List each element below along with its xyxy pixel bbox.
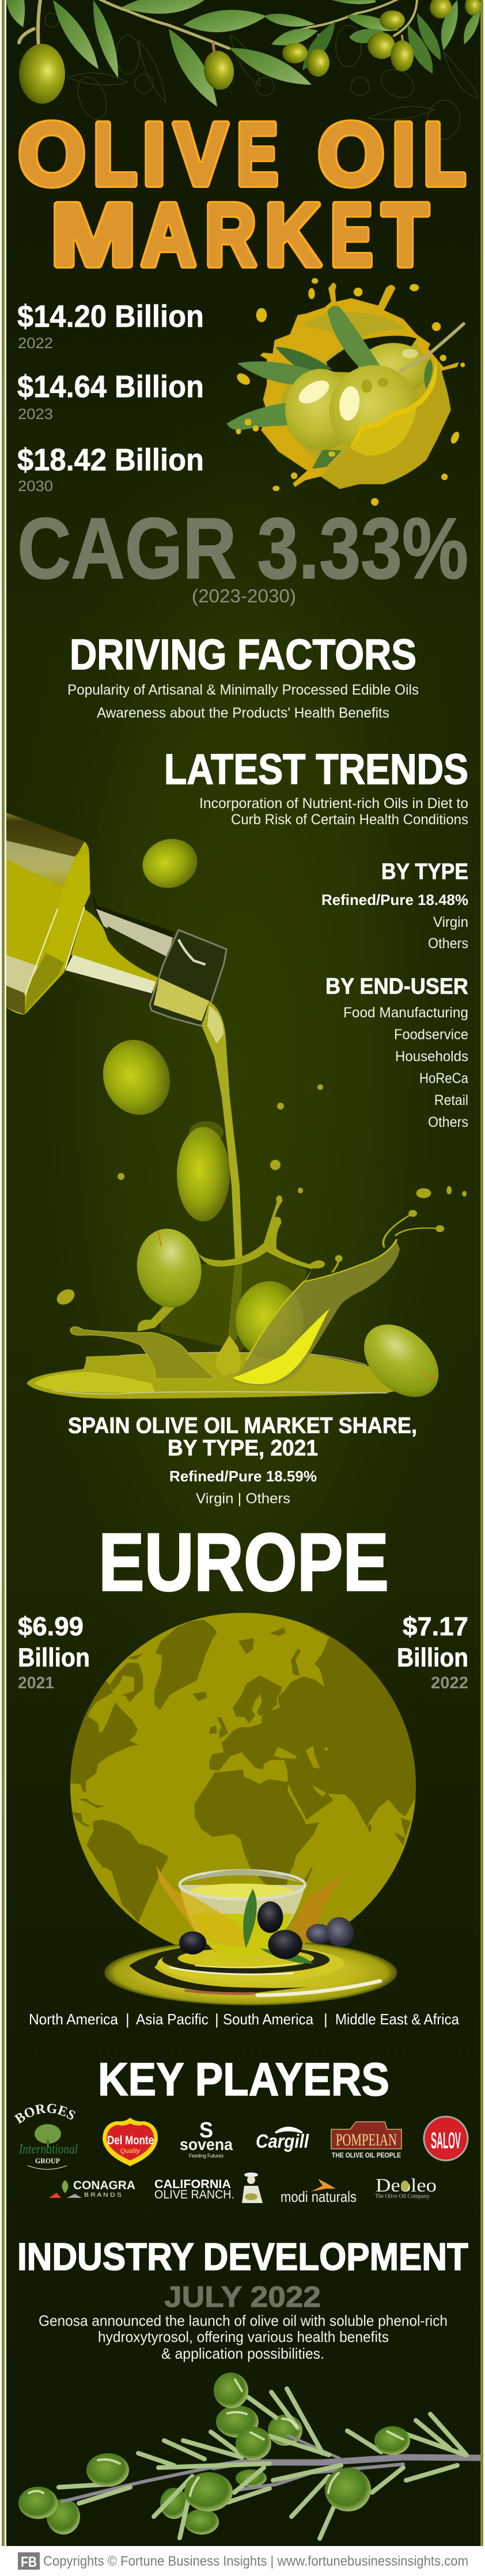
latest trends: Curb Risk of Certain Health Conditions — [231, 812, 468, 828]
glass rim — [180, 1870, 305, 1899]
title: R — [205, 186, 256, 284]
land masses — [62, 1620, 427, 1868]
dark gap in splash — [327, 335, 416, 373]
title: M — [51, 186, 136, 284]
by end-user segment: Foodservice — [394, 1027, 468, 1043]
splash back — [161, 1253, 306, 1351]
market value 2022: Billion — [397, 1643, 468, 1672]
key player logos — [14, 2104, 469, 2205]
market value 2021: 2021 — [18, 1674, 54, 1692]
neck oil — [71, 909, 160, 991]
left gold splash — [156, 1866, 252, 1952]
Madagascar — [302, 1868, 313, 1885]
body highlights — [25, 907, 85, 995]
industry development: hydroxytyrosol, offering various health benefits — [98, 2328, 389, 2345]
driving factors: Popularity of Artisanal & Minimally Processed Edible Oils — [67, 682, 419, 698]
logo: Salov — [424, 2117, 468, 2160]
footer copyright — [18, 2552, 468, 2570]
oil surface — [190, 1884, 293, 1900]
lower left leaf — [226, 402, 288, 431]
by type segment: Virgin — [433, 914, 468, 930]
middle ripple — [157, 1945, 344, 1982]
oil in bowl — [191, 1914, 293, 1957]
front olives — [18, 2369, 410, 2519]
body facet — [46, 855, 90, 972]
title: K — [265, 186, 321, 284]
blurred olive — [177, 1127, 230, 1221]
right gold splash — [291, 1869, 345, 1944]
olive highlights — [29, 2379, 403, 2496]
bottle cap glass — [150, 930, 226, 1026]
Spain market share: SPAIN OLIVE OIL MARKET SHARE, — [68, 1413, 417, 1438]
pale band — [6, 840, 76, 888]
logo: Pompeian: THE OLIVE OIL PEOPLE — [332, 2151, 401, 2159]
top leaf — [327, 306, 380, 369]
title: V — [174, 105, 228, 203]
logo: modi naturals — [281, 2179, 357, 2205]
inner bright ripple — [178, 1948, 314, 1968]
lower dark band — [6, 986, 25, 1014]
inner dark ripple — [162, 1946, 329, 1974]
by end-user segment — [325, 974, 468, 1130]
industry development: Genosa announced the launch of olive oil with soluble phenol-rich — [39, 2312, 448, 2329]
Spain market share: Refined/Pure 18.59% — [169, 1468, 317, 1485]
market value 2022 — [397, 1612, 468, 1692]
logo: sovena: sovena — [180, 2136, 233, 2154]
title: L — [93, 105, 137, 203]
value 2022: 2022 — [18, 334, 53, 352]
logo: Del Monte — [103, 2118, 158, 2166]
crown splash — [196, 1195, 325, 1282]
neck dark top — [92, 893, 175, 941]
oil front splash — [181, 1891, 250, 1947]
branch stems — [17, 0, 418, 52]
oil pool — [26, 1352, 438, 1399]
market value 2021: $6.99 — [18, 1612, 84, 1641]
value 2023: 2023 — [18, 405, 53, 423]
logo: Conagra — [49, 2179, 135, 2198]
green olives — [19, 0, 481, 104]
olive with stem, right — [350, 1317, 453, 1404]
right tendrils — [332, 1213, 440, 1272]
logo: California Olive Ranch — [154, 2173, 263, 2203]
key players heading: KEY PLAYERS — [98, 2054, 389, 2106]
logo: Deoleo: The Olive Oil Company. — [375, 2193, 430, 2200]
right olive — [329, 365, 419, 456]
by type segment — [321, 859, 468, 952]
oil crest — [351, 357, 437, 448]
centre column — [216, 1336, 241, 1376]
upper drops above the splash — [118, 1084, 323, 1180]
rim inner glass — [182, 1869, 303, 1883]
other regions: | — [215, 2011, 219, 2028]
driving factors: DRIVING FACTORS — [70, 631, 416, 678]
bottom leaf — [312, 450, 342, 469]
market value 2021 — [18, 1612, 90, 1692]
falling olive 2 — [103, 1040, 170, 1115]
value 2022: $14.20 Billion — [17, 299, 204, 334]
logo: sovena: Feeding Futures — [189, 2153, 223, 2159]
title: E — [237, 105, 278, 203]
lower pale band — [6, 955, 44, 993]
logo: sovena — [180, 2118, 233, 2159]
neck pale glass — [96, 909, 173, 961]
by end-user segment: Food Manufacturing — [343, 1005, 468, 1021]
title: I — [392, 105, 415, 203]
oil inside cap — [154, 978, 209, 1021]
value 2030: $18.42 Billion — [17, 443, 204, 477]
value 2023 — [17, 369, 204, 423]
logo: Borges — [14, 2104, 78, 2170]
oil ripple pool — [104, 1940, 397, 2005]
title: L — [423, 105, 466, 203]
industry development: JULY 2022 — [164, 2280, 321, 2313]
illustration: bottom olive branch — [18, 2369, 480, 2539]
white highlights — [170, 1964, 380, 1996]
logo: Borges: International — [18, 2142, 78, 2157]
title: T — [382, 186, 429, 284]
Spain market share — [68, 1413, 417, 1507]
upper leaf — [275, 347, 332, 375]
dark purple olives — [306, 1913, 358, 1951]
logo: Deoleo: Deoleo — [376, 2175, 437, 2196]
small right leaf — [424, 359, 433, 389]
Spain market share: BY TYPE, 2021 — [168, 1436, 318, 1461]
by type segment: Refined/Pure 18.48% — [321, 891, 468, 908]
other regions: South America — [223, 2011, 313, 2028]
glass bowl — [180, 1885, 305, 1957]
value 2022 — [17, 299, 204, 352]
dark ripple crescent — [129, 1943, 351, 1993]
left olive — [285, 369, 356, 450]
by end-user segment: Others — [428, 1114, 468, 1130]
industry development — [17, 2235, 468, 2362]
logo: Pompeian: POMPEIAN — [336, 2130, 397, 2149]
industry development: & application possibilities. — [161, 2345, 324, 2362]
top olive branches illustration — [6, 0, 481, 107]
lower facet — [25, 953, 65, 1013]
other regions — [29, 2011, 459, 2028]
logo: Conagra: B R A N D S — [84, 2192, 122, 2198]
neck interior — [108, 926, 167, 978]
by end-user segment: Retail — [434, 1092, 468, 1108]
latest trends: Incorporation of Nutrient-rich Oils in Diet to — [199, 795, 468, 812]
faint line-art leaves background — [45, 13, 478, 142]
back olive — [358, 343, 429, 395]
icon: Fortune Business Insights logo: FB — [21, 2554, 37, 2570]
title: O — [318, 105, 384, 203]
by end-user segment: HoReCa — [419, 1070, 468, 1087]
other regions: Asia Pacific — [136, 2011, 209, 2028]
lower South America — [86, 1842, 168, 1922]
value 2030: 2030 — [18, 477, 53, 495]
logo: sovena: S — [199, 2118, 213, 2143]
lower Africa — [241, 1839, 297, 1885]
logo: Borges: BORGES — [14, 2104, 75, 2124]
falling olive 1 — [143, 839, 197, 888]
other regions: North America — [29, 2011, 118, 2028]
oil sheet rim — [247, 1239, 397, 1360]
oil splash ring — [260, 282, 459, 489]
black olives — [179, 1902, 302, 1959]
illustration: oil splash and pool — [26, 1186, 467, 1404]
logo: California Olive Ranch: CALIFORNIA — [154, 2178, 231, 2191]
logo: Cargill: Cargill — [256, 2130, 309, 2152]
logo: modi naturals: modi naturals — [281, 2188, 357, 2205]
Europe heading: EUROPE — [98, 1517, 389, 1608]
market size figures — [17, 299, 204, 495]
by type segment: BY TYPE — [381, 859, 468, 884]
Spain market share: Virgin | Others — [196, 1491, 290, 1507]
back olives — [47, 2405, 302, 2534]
market value 2022: $7.17 — [403, 1612, 468, 1641]
title: I — [142, 105, 166, 203]
by end-user segment: Households — [395, 1048, 468, 1065]
branch — [62, 2435, 480, 2502]
long left leaf — [237, 361, 315, 385]
olive with stem, left — [134, 1228, 204, 1308]
driving factors — [67, 631, 419, 721]
neck pale bottom — [65, 955, 156, 993]
value 2030 — [17, 443, 204, 495]
title: A — [141, 186, 196, 284]
title — [18, 105, 466, 284]
illustration: oil cup with black olives — [104, 1866, 397, 2005]
neck dark bottom — [65, 972, 151, 1002]
other regions: | — [324, 2011, 328, 2028]
oil drops — [235, 278, 465, 506]
dark top band — [6, 813, 85, 857]
market value 2022: 2022 — [431, 1674, 468, 1692]
illustration: oil bottle — [6, 813, 226, 1026]
logo: Del Monte: Quality — [120, 2148, 141, 2155]
logo: California Olive Ranch: OLIVE RANCH. — [154, 2188, 234, 2201]
title: E — [331, 186, 373, 284]
oil drops — [54, 1186, 467, 1307]
latest trends — [164, 745, 468, 828]
highlights — [295, 376, 333, 408]
by type segment: Others — [428, 936, 468, 952]
pool outlines — [120, 1352, 367, 1365]
other regions: Middle East & Africa — [335, 2011, 459, 2028]
title: O — [18, 105, 85, 203]
globe — [62, 1613, 427, 1959]
front oil wave — [321, 357, 451, 489]
logo: Pompeian — [331, 2122, 401, 2159]
market value 2021: Billion — [18, 1643, 90, 1672]
bright oil core — [232, 1308, 329, 1384]
logo: Del Monte: Del Monte — [107, 2134, 154, 2147]
other regions: | — [126, 2011, 130, 2028]
logo: Borges: GROUP — [35, 2156, 60, 2165]
pool light left — [35, 1372, 155, 1393]
central olive — [236, 1281, 304, 1359]
bottle body — [6, 813, 90, 1014]
CAGR: (2023-2030) — [192, 586, 296, 606]
illustration: oil pouring and olives — [93, 832, 242, 1351]
left splash — [70, 1327, 215, 1379]
inner ring shading — [281, 312, 439, 477]
illustration: olives in oil splash — [226, 278, 465, 506]
driving factors: Awareness about the Products' Health Benefits — [97, 705, 389, 721]
logo: Conagra: CONAGRA — [73, 2179, 135, 2192]
right oil sheet — [231, 1239, 400, 1386]
thin leaves — [59, 2389, 467, 2539]
olive through oil — [350, 399, 418, 455]
oil stream — [202, 1001, 242, 1351]
olive leaves — [6, 0, 480, 107]
twig — [400, 324, 464, 371]
left tendril — [138, 1307, 175, 1332]
cap highlight — [179, 940, 206, 964]
by end-user segment: BY END-USER — [325, 974, 468, 999]
leaves — [243, 1889, 257, 1948]
value 2023: $14.64 Billion — [17, 369, 204, 404]
